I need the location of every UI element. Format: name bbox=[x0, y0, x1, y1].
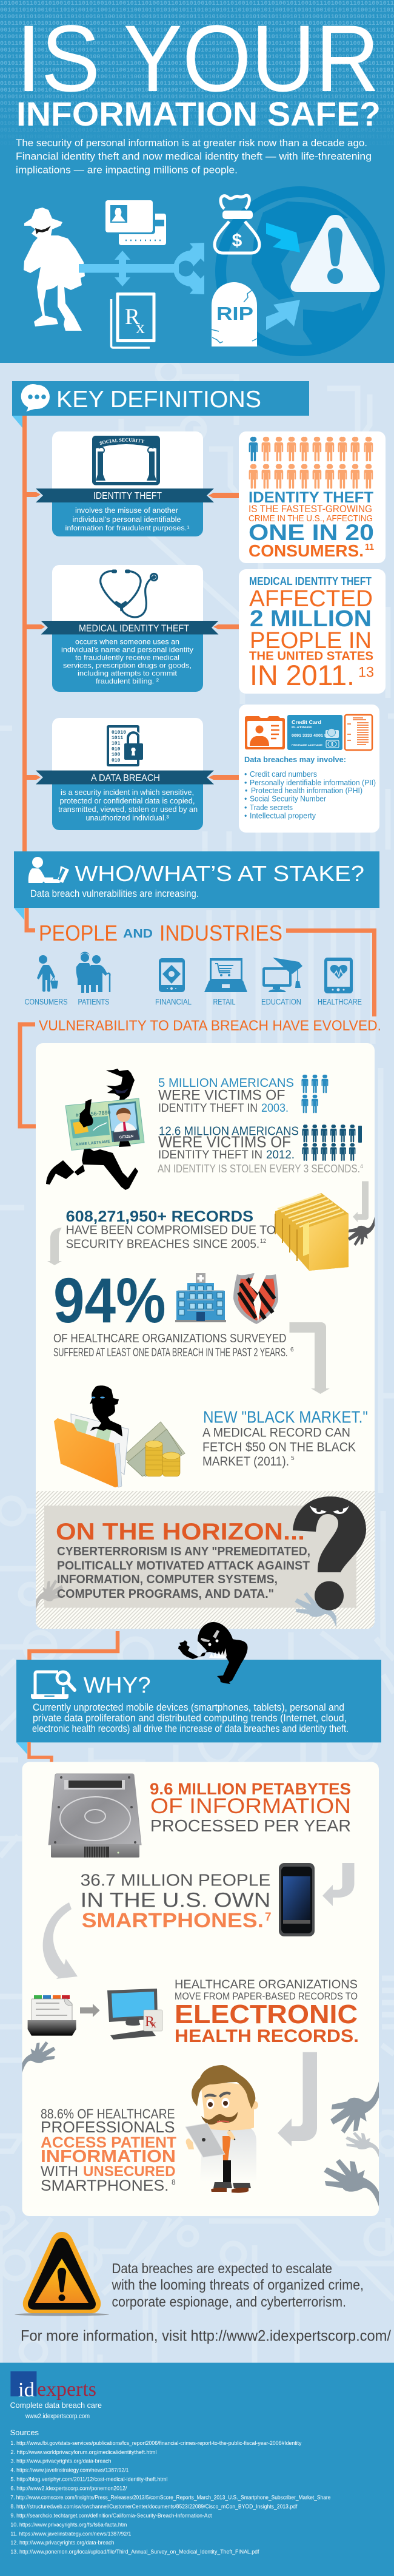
ribbon: data breach bbox=[36, 771, 214, 784]
connectors: medical identity theft bbox=[27, 624, 239, 629]
panel: on the horizon bbox=[36, 1491, 375, 1629]
cyberterrorism definition: COMPUTER PROGRAMS, AND DATA." bbox=[57, 1587, 274, 1601]
panel: identity theft definition bbox=[36, 431, 214, 536]
stat: professionals access patient info bbox=[41, 2106, 176, 2194]
sources list: 8. http://structuredweb.com/sw/swchannel/CustomerCenter/documents/8523/22089/Cisco_mCon_BYOD_Insights_2013.pdf bbox=[10, 2504, 298, 2510]
stat: 12.6 million americans: AN IDENTITY IS STOLEN EVERY 3 SECONDS. bbox=[158, 1163, 360, 1175]
hand: right lower bbox=[324, 2159, 379, 2206]
definition text bbox=[65, 507, 190, 532]
stat: identity theft: ONE IN 20 bbox=[249, 520, 374, 545]
sources list: 2. http://www.worldprivacyforum.org/medicalidentitytheft.html bbox=[10, 2449, 156, 2456]
sources list: 5. http://blog.veriphyr.com/2011/12/cost-medical-identity-theft.html bbox=[10, 2476, 167, 2483]
stat: 5 million americans bbox=[158, 1077, 294, 1115]
panel: affected 2 million: 2 MILLION bbox=[250, 606, 372, 632]
icon: orange ID folder bbox=[245, 716, 285, 749]
labels: people and industries: PATIENTS bbox=[78, 996, 109, 1006]
stat: new black market: MARKET (2011). bbox=[202, 1455, 289, 1469]
stat: 12.6 million americans: 12.6 MILLION AMERICANS bbox=[159, 1125, 299, 1138]
binary code pattern: 0010110101001011101010010110010110110010110101001011101010010111010100101100101101011001011010101001011101 bbox=[0, 7, 394, 14]
heading: people and industries bbox=[39, 921, 282, 945]
light page background bbox=[0, 363, 394, 2363]
icon: education bbox=[262, 958, 302, 992]
icon: tombstone: RIP bbox=[216, 303, 253, 324]
stat: 5 million americans: 5 MILLION AMERICANS bbox=[158, 1077, 294, 1090]
stat: professionals access patient info: INFORMATION bbox=[41, 2147, 176, 2166]
people pictogram: 1 in 20 bbox=[249, 437, 373, 488]
data breach list: Personally identifiable information (PII) bbox=[250, 779, 376, 787]
data breach list: • bbox=[244, 770, 247, 779]
sources list: 12. http://www.privacyrights.org/data-breach bbox=[10, 2540, 114, 2546]
labels: people and industries: FINANCIAL bbox=[155, 996, 192, 1006]
data breach list: Data breaches may involve: bbox=[244, 756, 346, 764]
icon: tombstone bbox=[212, 282, 257, 347]
binary code pattern: 0010110101001011101010010110010110110010110101001011101010010111010100101100101101011001011010101001011101 bbox=[0, 74, 394, 81]
binary code pattern: 0010110101001011101010010110010110110010110101001011101010010111010100101100101101011001011010101001011101 bbox=[0, 101, 394, 107]
binary code pattern: 0101101011010100101110101001011100101101001011010100101110101001011010100101100101101001011010100101110101 bbox=[0, 41, 394, 47]
data breach list bbox=[244, 756, 376, 820]
icon: social security card: SOCIAL SECURITY bbox=[99, 438, 144, 445]
panel: affected 2 million: IN 2011. bbox=[250, 659, 355, 691]
title: INFORMATION SAFE? bbox=[16, 95, 381, 133]
heading: people and industries: AND bbox=[123, 927, 153, 941]
panel: vulnerability statistics bbox=[36, 1043, 375, 1491]
cyberterrorism definition bbox=[57, 1545, 310, 1601]
illustration: thief with folder and money bbox=[54, 1385, 185, 1487]
binary code pattern: 0101101011010100101110101001011100101101001011010100101110101001011010100101100101101001011010100101110101 bbox=[0, 21, 394, 27]
intro paragraph: Financial identity theft and now medical identity theft — with life-threatening bbox=[16, 150, 372, 162]
connectors: data breach bbox=[27, 775, 239, 780]
icon: binary file and padlock: 01010 bbox=[112, 730, 126, 735]
illustration: thief stealing ID card: #123456-7890 bbox=[75, 1109, 111, 1118]
icon: stethoscope bbox=[101, 569, 158, 617]
stat: electronic health records: MOVE FROM PAPER-BASED RECORDS TO bbox=[175, 1990, 358, 2002]
binary code pattern: 0010110101001011101010010110010110110010110101001011101010010111010100101100101101011001011010101001011101 bbox=[0, 114, 394, 121]
heading band: who/what's at stake bbox=[14, 851, 379, 920]
stat: new black market: FETCH $50 ON THE BLACK bbox=[202, 1441, 356, 1454]
closing statement: with the looming threats of organized crime, bbox=[112, 2277, 364, 2293]
icon row: people and industries bbox=[25, 952, 362, 1006]
hand: blue-grey right bbox=[295, 1592, 336, 1628]
icon: healthcare tablet bbox=[324, 958, 353, 993]
binary code pattern: 0010110101001011101010010110010110110010110101001011101010010111010100101100101101011001011010101001011101 bbox=[0, 141, 394, 147]
connectors: identity theft bbox=[27, 492, 239, 498]
sources list: 7. http://www.comscore.com/Insights/Press_Releases/2013/5/comScore_Reports_March_2013_U.S._Smartphone_Subscriber_Market_Share bbox=[10, 2494, 330, 2501]
people pictogram: 2012 bbox=[302, 1124, 362, 1161]
stat: electronic health records: HEALTHCARE ORGANIZATIONS bbox=[175, 1978, 358, 1991]
panel: data breaches may involve bbox=[239, 705, 379, 833]
hand: right middle bbox=[346, 2132, 379, 2157]
footer band bbox=[0, 2363, 394, 2576]
stat: professionals access patient info: SMARTPHONES. bbox=[41, 2177, 169, 2194]
ribbon: identity theft bbox=[36, 488, 214, 502]
binary code pattern: 0100101101010010111010100101100101101100101101010010111010100101110101001011001011010010110101010010111010 bbox=[0, 94, 394, 101]
definition text: is a security incident in which sensitive, bbox=[61, 788, 194, 797]
panel: one in 20 consumers bbox=[239, 431, 386, 563]
arrow: curved to health records bbox=[43, 1902, 78, 1979]
definition text: occurs when someone uses an bbox=[75, 638, 179, 646]
ribbon: medical identity theft bbox=[41, 621, 218, 635]
heading: vulnerability evolved: VULNERABILITY TO DATA BREACH HAVE EVOLVED. bbox=[39, 1018, 381, 1034]
panel: affected 2 million: THE UNITED STATES bbox=[249, 649, 373, 663]
stat: smartphones bbox=[81, 1871, 272, 1932]
panel: medical identity theft definition bbox=[41, 565, 218, 692]
labels: people and industries: EDUCATION bbox=[261, 996, 301, 1006]
icon: computer with prescription: R bbox=[145, 2014, 155, 2030]
icon: binary file and padlock: 1011 bbox=[112, 735, 123, 741]
stat: identity theft: IDENTITY THEFT bbox=[249, 489, 373, 506]
data breach list: • bbox=[244, 812, 247, 820]
icon: hard drive bbox=[48, 1774, 141, 1858]
stat: identity theft: CONSUMERS. bbox=[249, 541, 364, 560]
definition text: fraudulent billing. ² bbox=[96, 677, 159, 685]
stat: new black market: 5 bbox=[291, 1455, 295, 1462]
icon: binary file and padlock: 100 bbox=[112, 752, 121, 757]
definition text: services, prescription drugs or goods, bbox=[63, 661, 192, 670]
binary code pattern: 0101101011010100101110101001011100101101001011010100101110101001011010100101100101101001011010100101110101 bbox=[0, 67, 394, 74]
stat: petabytes: 9.6 MILLION PETABYTES bbox=[150, 1780, 351, 1798]
data breach list: • bbox=[244, 803, 247, 812]
icon: ID cards bbox=[104, 198, 166, 245]
circuit background pattern bbox=[0, 361, 394, 2364]
heading band: why: WHY? bbox=[84, 1672, 151, 1697]
tagline bbox=[10, 2401, 102, 2420]
arrow: bag to warning bbox=[266, 223, 300, 252]
icon: broken shield bbox=[233, 1273, 278, 1324]
arrow: to smartphones bbox=[322, 1863, 354, 1906]
stat text: healthcare organizations surveyed bbox=[53, 1332, 294, 1359]
ribbon: medical identity theft: MEDICAL IDENTITY THEFT bbox=[79, 624, 189, 634]
stat: records compromised: HAVE BEEN COMPROMISED DUE TO bbox=[66, 1224, 276, 1237]
icon: laptop and magnifier bbox=[31, 1672, 75, 1699]
hero banner background bbox=[0, 0, 394, 363]
definition text: involves the misuse of another bbox=[75, 507, 178, 515]
icon: exclamation mark bbox=[327, 228, 343, 284]
stat: 5 million americans: WERE VICTIMS OF bbox=[158, 1087, 285, 1104]
labels: people and industries: RETAIL bbox=[213, 996, 236, 1006]
arrow: stat to records bbox=[353, 1181, 369, 1222]
icon: evil question mark bbox=[293, 1496, 366, 1611]
stat: professionals access patient info: PROFESSIONALS bbox=[41, 2118, 175, 2136]
tagline: www2.idexpertscorp.com bbox=[25, 2413, 90, 2420]
icon: prescription documents bbox=[112, 292, 155, 348]
icon: warning sign bbox=[15, 2232, 109, 2316]
sources list: 9. http://searchcio.techtarget.com/definition/California-Security-Breach-Information-Act bbox=[10, 2512, 212, 2519]
why paragraph: Currently unprotected mobile devices (smartphones, tablets), personal and bbox=[33, 1702, 344, 1713]
arrow: records to 94 percent bbox=[47, 1228, 62, 1265]
data breach list: Social Security Number bbox=[250, 795, 326, 803]
binary code pattern bbox=[0, 1, 394, 147]
closing statement: corporate espionage, and cyberterrorism. bbox=[112, 2294, 346, 2310]
stat: identity theft: CRIME IN THE U.S., AFFECTING bbox=[249, 513, 373, 524]
icon: globe bbox=[221, 192, 379, 351]
icon: credit card bbox=[287, 715, 342, 750]
cyberterrorism definition: CYBERTERRORISM IS ANY "PREMEDITATED, bbox=[57, 1545, 310, 1558]
data breach list: • bbox=[244, 795, 247, 803]
icon: money bag: $ bbox=[232, 231, 242, 251]
stat: 12.6 million americans: 2012. bbox=[266, 1149, 295, 1161]
heading band: key definitions bbox=[12, 381, 309, 428]
stat: 12.6 million americans: 4 bbox=[360, 1163, 363, 1169]
stat: records compromised bbox=[66, 1208, 276, 1251]
orange connector: who to people bbox=[27, 908, 35, 930]
stat: records compromised: 12 bbox=[260, 1238, 266, 1244]
panel: data breach definition bbox=[36, 718, 214, 830]
orange connector: why to panel bbox=[29, 1742, 52, 1762]
cyberterrorism definition: INFORMATION, COMPUTER SYSTEMS, bbox=[57, 1573, 278, 1586]
binary code pattern: 0100101101010010111010100101100101101100101101010010111010100101110101001011001011010010110101010010111010 bbox=[0, 14, 394, 21]
sources list bbox=[10, 2428, 330, 2555]
icon: warning triangle bbox=[291, 215, 379, 291]
stat: electronic health records bbox=[175, 1978, 359, 2046]
data breach list: Intellectual property bbox=[250, 812, 316, 820]
people pictogram: 2003 bbox=[301, 1075, 328, 1113]
binary code pattern: 0010110101001011101010010110010110110010110101001011101010010111010100101100101101011001011010101001011101 bbox=[0, 87, 394, 94]
icon: person at laptop bbox=[28, 857, 69, 883]
icon: retail laptop bbox=[204, 958, 247, 992]
definition text: including attempts to commit bbox=[78, 669, 178, 677]
illustration: doctor with tablet bbox=[185, 2065, 258, 2193]
stat: smartphones: SMARTPHONES. bbox=[82, 1909, 264, 1932]
hand: right upper bbox=[330, 2081, 379, 2134]
icon: credit card: Credit Card bbox=[292, 719, 321, 725]
binary code pattern: 0100101101010010111010100101100101101100101101010010111010100101110101001011001011010010110101010010111010 bbox=[0, 34, 394, 41]
sources list: Sources bbox=[10, 2428, 39, 2437]
title: IS YOUR bbox=[16, 6, 379, 112]
panel: affected 2 million bbox=[239, 569, 386, 694]
stat: smartphones: IN THE U.S. OWN bbox=[81, 1888, 270, 1912]
binary code pattern: 0010110101001011101010010110010110110010110101001011101010010111010100101100101101011001011010101001011101 bbox=[0, 47, 394, 54]
icon: credit card: FIRSTNAME LASTNAME bbox=[292, 743, 322, 746]
why paragraph: private data proliferation and distributed computing trends (Internet, cloud, bbox=[33, 1712, 347, 1724]
arrow: paper to electronic bbox=[80, 2004, 100, 2017]
definition text: information for fraudulent purposes.¹ bbox=[65, 525, 190, 532]
icon: prescription documents: R bbox=[125, 305, 140, 330]
icon: binary file and padlock: 010 bbox=[112, 758, 121, 763]
hand: reaching for records bbox=[348, 1217, 375, 1246]
heading band: who/what's at stake: WHO/WHAT’S AT STAKE? bbox=[75, 861, 364, 886]
binary code pattern: 0101101011010100101110101001011100101101001011010100101110101001011010100101100101101001011010100101110101 bbox=[0, 81, 394, 87]
definition text bbox=[61, 638, 193, 685]
stat: smartphones: 36.7 MILLION PEOPLE bbox=[81, 1871, 270, 1890]
heading: people and industries: PEOPLE bbox=[39, 921, 118, 945]
binary code pattern: 0100101101010010111010100101100101101100101101010010111010100101110101001011001011010010110101010010111010 bbox=[0, 134, 394, 141]
illustration: black monster climbing the band bbox=[178, 1622, 248, 1684]
definition text bbox=[58, 788, 198, 822]
binary code pattern: 0010110101001011101010010110010110110010110101001011101010010111010100101100101101011001011010101001011101 bbox=[0, 127, 394, 134]
definition text: individual’s name and personal identity bbox=[61, 646, 193, 654]
data breach list: • bbox=[245, 786, 247, 795]
arrow: 94 percent to black market bbox=[290, 1322, 330, 1394]
heading: on the horizon: ON THE HORIZON... bbox=[56, 1519, 305, 1545]
stat: electronic health records: HEALTH RECORDS. bbox=[175, 2026, 359, 2046]
why paragraph bbox=[32, 1702, 349, 1734]
panel: affected 2 million: AFFECTED bbox=[249, 586, 373, 612]
binary code pattern: 1010010110101010010111010100101100101110100101101010100101110101001011101010010110010111010010110101001011 bbox=[0, 1, 394, 7]
hand: left of panel bbox=[22, 2041, 56, 2073]
logo: id experts: experts bbox=[37, 2378, 96, 2401]
data breach list: Protected health information (PHI) bbox=[251, 786, 362, 795]
logo: id experts: id bbox=[18, 2379, 35, 2401]
stat text: healthcare organizations surveyed: OF HEALTHCARE ORGANIZATIONS SURVEYED bbox=[53, 1332, 286, 1345]
stat: 12.6 million americans bbox=[158, 1125, 363, 1175]
stat: 94 percent: 94% bbox=[53, 1265, 166, 1336]
hand: grey left bbox=[36, 1580, 63, 1611]
panel: affected 2 million: MEDICAL IDENTITY THEFT bbox=[249, 575, 372, 587]
tagline: Complete data breach care bbox=[10, 2401, 102, 2410]
stat: identity theft: 11 bbox=[365, 542, 374, 552]
intro paragraph: implications — are impacting millions of people. bbox=[16, 164, 238, 176]
binary code pattern: 0100101101010010111010100101100101101100101101010010111010100101110101001011001011010010110101010010111010 bbox=[0, 121, 394, 127]
stat: 5 million americans: IDENTITY THEFT IN bbox=[158, 1102, 258, 1115]
stat: petabytes: PROCESSED PER YEAR bbox=[150, 1816, 351, 1835]
stat: 12.6 million americans: IDENTITY THEFT IN bbox=[158, 1149, 262, 1161]
sources list: 3. http://www.privacyrights.org/data-breach bbox=[10, 2458, 111, 2465]
icon: credit card: PLATINUM bbox=[292, 726, 312, 729]
icon: spy silhouette bbox=[24, 208, 85, 331]
sources list: 6. http://www2.idexpertscorp.com/ponemon2012/ bbox=[10, 2486, 127, 2492]
icon: credit card: 0091 3333 4001 9000 bbox=[292, 734, 335, 738]
binary code pattern: 0010110101001011101010010110010110110010110101001011101010010111010100101100101101011001011010101001011101 bbox=[0, 27, 394, 34]
intro paragraph bbox=[16, 137, 372, 176]
icon: hospital bbox=[175, 1273, 226, 1322]
icon: binary file and padlock: 101 bbox=[112, 741, 121, 746]
heading: people and industries: INDUSTRIES bbox=[159, 921, 282, 945]
stat: identity theft bbox=[249, 489, 374, 560]
stat: identity theft: IS THE FASTEST-GROWING bbox=[249, 504, 372, 515]
labels: people and industries bbox=[25, 996, 362, 1006]
icon: patients bbox=[76, 952, 110, 993]
stat: petabytes bbox=[150, 1780, 351, 1835]
intro paragraph: The security of personal information is at greater risk now than a decade ago. bbox=[16, 137, 367, 149]
heading band: who/what's at stake: Data breach vulnerabilities are increasing. bbox=[30, 888, 199, 899]
orange connector: vulnerability panel bbox=[20, 1024, 36, 1126]
arrow: records to professionals bbox=[278, 2052, 317, 2146]
icon: prescription documents: x bbox=[136, 317, 145, 337]
cyberterrorism definition: POLITICALLY MOTIVATED ATTACK AGAINST bbox=[57, 1560, 310, 1573]
labels: people and industries: HEALTHCARE bbox=[318, 996, 362, 1006]
data breach list: Trade secrets bbox=[250, 803, 293, 812]
icon: smartphone bbox=[279, 1863, 315, 1936]
stat: electronic health records: ELECTRONIC bbox=[175, 2000, 358, 2029]
stat text: healthcare organizations surveyed: 6 bbox=[290, 1347, 294, 1353]
icon: consumer bbox=[37, 955, 58, 992]
stat: 12.6 million americans: WERE VICTIMS OF bbox=[158, 1133, 291, 1151]
orange connector line: definitions bbox=[22, 416, 27, 851]
closing statement: Data breaches are expected to escalate bbox=[112, 2260, 332, 2276]
icon: money bag bbox=[215, 195, 259, 253]
sources list: 10. https://www.privacyrights.org/fs/fs6a-facta.htm bbox=[10, 2521, 127, 2528]
orange connector: horizon to why bbox=[29, 1631, 118, 1660]
icon: social security card bbox=[92, 436, 160, 485]
stat: professionals access patient info: 88.6% OF HEALTHCARE bbox=[41, 2106, 175, 2121]
stat: smartphones: 7 bbox=[265, 1911, 272, 1924]
icon: financial phone bbox=[159, 958, 185, 992]
binary code pattern: 0101101011010100101110101001011100101101001011010100101110101001011010100101100101101001011010100101110101 bbox=[0, 54, 394, 61]
stat: records compromised: 608,271,950+ RECORDS bbox=[66, 1208, 253, 1225]
icon: paper record scanner bbox=[28, 1995, 76, 2036]
stat: professionals access patient info: UNSECURED bbox=[83, 2163, 176, 2180]
stat: petabytes: OF INFORMATION bbox=[150, 1794, 351, 1818]
stat: new black market: A MEDICAL RECORD CAN bbox=[202, 1426, 350, 1440]
illustration: thief stealing ID card bbox=[46, 1069, 144, 1190]
icon: computer with prescription: x bbox=[151, 2018, 156, 2030]
illustration: thief stealing ID card: NAME LASTNAME bbox=[76, 1140, 111, 1147]
data breach list: • bbox=[244, 779, 247, 787]
definition text: protected or confidential data is copied, bbox=[59, 796, 195, 805]
stat: 5 million americans: 2003. bbox=[261, 1102, 289, 1115]
sources list: 13. http://www.ponemon.org/local/upload/file/Third_Annual_Survey_on_Medical_Identity_Theft_FINAL.pdf bbox=[10, 2549, 259, 2555]
orange connector: industries to vulnerability bbox=[286, 931, 375, 1016]
heading band: key definitions: KEY DEFINITIONS bbox=[56, 387, 261, 413]
stat: new black market bbox=[202, 1408, 368, 1469]
panel: why statistics bbox=[22, 1762, 379, 2216]
stat: professionals access patient info: WITH bbox=[41, 2163, 78, 2180]
icon: yellow folder stack bbox=[275, 1193, 349, 1271]
labels: people and industries: CONSUMERS bbox=[25, 996, 68, 1006]
binary code pattern: 0100101101010010111010100101100101101100101101010010111010100101110101001011001011010010110101010010111010 bbox=[0, 107, 394, 114]
stat: records compromised: SECURITY BREACHES SINCE 2005. bbox=[66, 1238, 259, 1251]
heading band: why bbox=[16, 1660, 381, 1754]
panel: affected 2 million: PEOPLE IN bbox=[250, 628, 372, 654]
icon: computer with prescription bbox=[107, 1989, 162, 2040]
sources list: 11. https://www.javelinstrategy.com/news/1387/92/1 bbox=[10, 2530, 131, 2537]
icon: orange document bbox=[345, 715, 372, 750]
stat: professionals access patient info: 8 bbox=[172, 2178, 176, 2186]
closing statement bbox=[112, 2260, 364, 2310]
icon: binary file and padlock: 010 bbox=[112, 746, 121, 752]
sources list: 4. https://www.javelinstrategy.com/news/1387/92/1 bbox=[10, 2467, 129, 2474]
data breach list: Credit card numbers bbox=[250, 770, 317, 779]
ribbon: identity theft: IDENTITY THEFT bbox=[93, 491, 162, 501]
binary code pattern: 0010110101001011101010010110010110110010110101001011101010010111010100101100101101011001011010101001011101 bbox=[0, 61, 394, 67]
definition text: transmitted, viewed, stolen or used by an bbox=[58, 805, 198, 814]
definition text: to fraudulently receive medical bbox=[75, 653, 179, 661]
definition text: individual's personal identifiable bbox=[73, 516, 181, 524]
stat: professionals access patient info: ACCESS PATIENT bbox=[41, 2134, 176, 2151]
ribbon: data breach: A DATA BREACH bbox=[91, 773, 160, 783]
definition text: unauthorized individual.³ bbox=[86, 813, 169, 822]
icon: binary file and padlock bbox=[107, 725, 143, 766]
stat: new black market: NEW "BLACK MARKET." bbox=[203, 1408, 368, 1426]
illustration: thief stealing ID card: CITIZEN bbox=[119, 1135, 133, 1140]
sources list: 1. http://www.fbi.gov/stats-services/publications/fcs_report2006/financial-crimes-report-to-the-public-fiscal-year-2006#Identity bbox=[10, 2440, 302, 2447]
panel: affected 2 million: 13 bbox=[358, 664, 374, 681]
logo: id experts bbox=[10, 2371, 96, 2401]
arrow: branching paths bbox=[79, 243, 204, 294]
arrow: tombstone to warning bbox=[266, 300, 300, 330]
